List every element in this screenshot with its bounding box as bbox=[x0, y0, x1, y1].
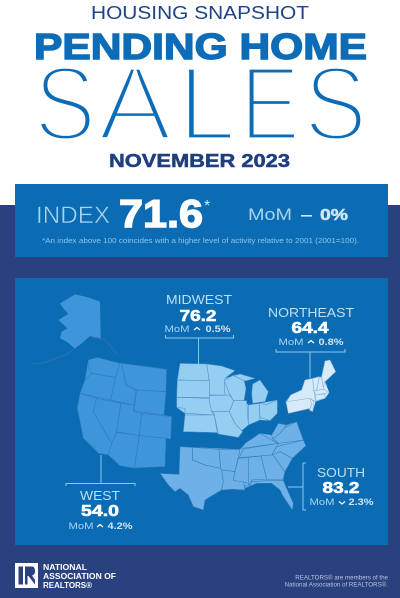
logo: organisation name: NATIONAL bbox=[43, 563, 87, 572]
dash bbox=[301, 215, 312, 217]
heading: sales: L bbox=[178, 45, 236, 163]
callout: midwest: 0.5% bbox=[206, 324, 231, 335]
callout: west bbox=[66, 455, 135, 532]
callout: south: 2.3% bbox=[348, 497, 374, 508]
map: midwest region bbox=[177, 363, 277, 437]
callout: west: 54.0 bbox=[81, 503, 119, 520]
callout: midwest: MIDWEST bbox=[166, 293, 232, 307]
asterisk: * bbox=[204, 198, 210, 215]
panel: regional map bbox=[15, 278, 388, 545]
month over month value: 0% bbox=[320, 207, 348, 224]
callout: northeast: 0.8% bbox=[318, 337, 344, 348]
heading: pending home: PENDING HOME bbox=[34, 26, 367, 67]
callout: west: WEST bbox=[80, 489, 120, 503]
callout: west: 4.2% bbox=[108, 521, 133, 532]
callout: northeast: 64.4 bbox=[292, 320, 329, 337]
panel: national index bbox=[15, 184, 388, 257]
map: west region bbox=[77, 357, 172, 468]
callout: midwest: 76.2 bbox=[180, 308, 216, 325]
footer note: REALTORS® are members of the bbox=[295, 574, 389, 582]
month over month: MoM bbox=[248, 205, 292, 224]
footer note bbox=[285, 574, 389, 588]
callout: south bbox=[288, 463, 374, 510]
logo: organisation name: REALTORS® bbox=[43, 581, 92, 590]
footer note: National Association of REALTORS®. bbox=[285, 582, 388, 588]
callout: south: 83.2 bbox=[322, 480, 360, 497]
callout: midwest: MoM bbox=[164, 324, 190, 335]
index label: INDEX bbox=[36, 202, 110, 229]
callout: northeast: MoM bbox=[278, 337, 304, 348]
heading: sales bbox=[34, 45, 367, 163]
map: northeast region bbox=[286, 360, 336, 413]
logo: realtor R mark bbox=[15, 563, 38, 588]
callout: west: MoM bbox=[68, 521, 94, 532]
heading: sales: E bbox=[240, 45, 300, 163]
callout: northeast: NORTHEAST bbox=[268, 306, 354, 320]
logo: organisation name bbox=[43, 563, 116, 590]
footer and lower background band bbox=[0, 205, 400, 598]
callout: midwest bbox=[164, 293, 234, 364]
heading: sales: S bbox=[34, 45, 96, 163]
logo: organisation name: ASSOCIATION OF bbox=[43, 572, 116, 581]
callout: south: SOUTH bbox=[317, 466, 365, 480]
map: alaska bbox=[32, 294, 117, 364]
callout: south: MoM bbox=[310, 497, 335, 508]
map: south region bbox=[160, 422, 306, 510]
index value: 71.6 bbox=[119, 193, 203, 236]
heading: november 2023: NOVEMBER 2023 bbox=[109, 151, 290, 171]
heading: sales: A bbox=[98, 45, 172, 163]
heading: housing snapshot: HOUSING SNAPSHOT bbox=[91, 3, 309, 23]
heading: sales: S bbox=[304, 45, 367, 163]
callout: northeast bbox=[268, 306, 354, 378]
footnote: *An index above 100 coincides with a higher level of activity relative to 2001 (2001=100). bbox=[42, 238, 359, 245]
